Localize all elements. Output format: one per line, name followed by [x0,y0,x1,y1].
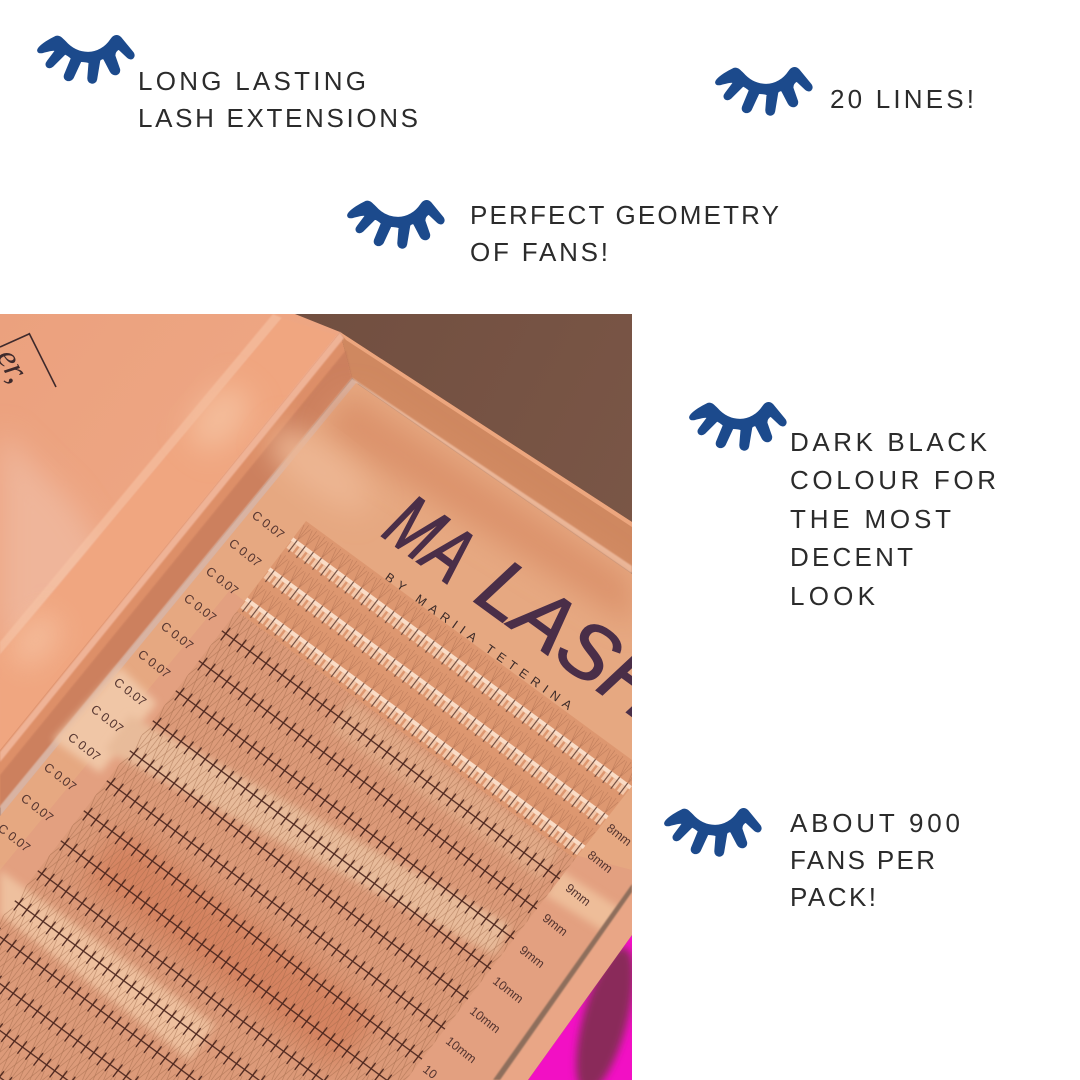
lid handwriting [0,333,56,389]
text: dark black colour: LOOK [790,581,876,611]
right length labels: 9mm [517,943,547,971]
photo: lash tray in peach box [0,314,684,1080]
text: perfect geometry of fans: PERFECT GEOMETRY [470,200,779,230]
text: long lasting lash extensions [138,66,418,133]
pale top lash strips [237,521,632,859]
left curl labels: C 0.07 [111,675,149,709]
text: about 900 fans per pack [790,808,960,912]
text: 20 lines: 20 LINES! [830,84,974,114]
left curl labels: C 0.07 [41,760,79,794]
right length labels: 8mm [604,821,634,849]
row colour washes [0,708,568,1080]
tray rim [0,332,632,818]
text: dark black colour [790,427,996,611]
lash rows [0,508,634,1080]
icon: lash 2 [717,69,811,114]
text: long lasting lash extensions: LONG LASTING [138,66,366,96]
brown backdrop [0,314,632,1080]
label strips [4,596,626,936]
icon: lash 1 [39,37,133,82]
text: dark black colour: COLOUR FOR [790,465,996,495]
left curl labels [0,508,287,855]
icon: lash 5 [666,810,760,855]
right length labels: 9mm [563,881,593,909]
left curl labels: C 0.07 [135,647,173,681]
box lid [0,314,340,760]
left curl labels: C 0.07 [203,564,241,598]
right length labels: 8mm [585,848,615,876]
text: about 900 fans per pack: ABOUT 900 [790,808,960,838]
logo text: LASH [462,542,684,737]
text: dark black colour: THE MOST [790,504,951,534]
left curl labels: C 0.07 [158,619,196,653]
logo text [380,496,632,718]
right length labels [420,821,634,1080]
right length labels: 10mm [490,974,526,1006]
icon: lash 4 [691,404,785,449]
text: long lasting lash extensions: LASH EXTENSIONS [138,103,418,133]
logo text: MA [370,478,491,599]
logo text: BY MARIIA TETERINA [382,570,575,713]
left curl labels: C 0.07 [65,730,103,764]
left curl labels: C 0.07 [88,702,126,736]
icon: lash 3 [349,202,443,247]
left curl labels: C 0.07 [249,508,287,542]
text: dark black colour: DECENT [790,542,913,572]
right rim and pink background [493,884,646,1080]
left curl labels: C 0.07 [18,791,56,825]
right length labels: 9mm [540,911,570,939]
text: about 900 fans per pack: PACK! [790,882,876,912]
text: perfect geometry of fans [470,200,779,267]
left curl labels: C 0.07 [181,591,219,625]
text: dark black colour: DARK BLACK [790,427,988,457]
right length labels: 10mm [467,1004,503,1036]
tray floor [0,383,632,870]
dark fan rows [0,611,575,1080]
left curl labels: C 0.07 [226,536,264,570]
right length labels: 10mm [443,1034,479,1066]
text: about 900 fans per pack: FANS PER [790,845,935,875]
text: perfect geometry of fans: OF FANS! [470,237,608,267]
